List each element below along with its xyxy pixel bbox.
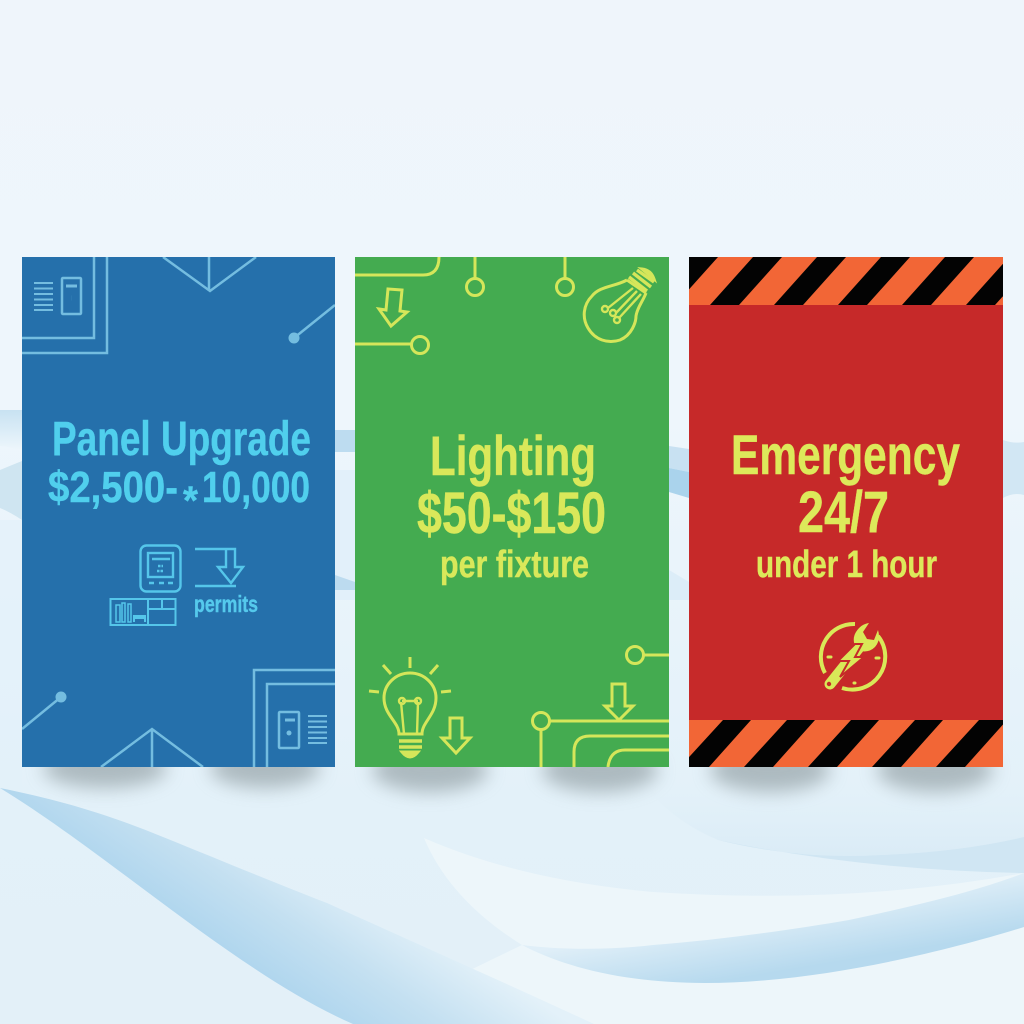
card shadows: [43, 748, 993, 792]
panel: emergency: [689, 257, 1003, 767]
decorative circuit line art, blue card: [22, 257, 335, 767]
price: $2,500 to $10,000: [48, 463, 310, 523]
price: $2,500 to $10,000: $2,500-: [48, 463, 178, 512]
icon: tilted light bulb: [584, 269, 654, 342]
response: under 1 hour: under 1 hour: [756, 544, 937, 586]
price: $2,500 to $10,000: 10,000: [202, 463, 310, 512]
green card background: [355, 257, 669, 767]
arrow: down to permits: [195, 549, 243, 586]
panel: panel upgrade: [22, 257, 335, 767]
panel: lighting: [355, 257, 669, 767]
hazard stripes bottom: [680, 720, 1007, 767]
decorative circuit traces, green card: [355, 257, 669, 767]
hazard stripes top: [689, 257, 1003, 305]
blue card background: [22, 257, 335, 767]
heading: Panel Upgrade: Panel Upgrade: [52, 413, 311, 466]
price: $50-$150: $50-$150: [417, 481, 606, 546]
price: $2,500 to $10,000: *: [183, 479, 198, 523]
label: per fixture: per fixture: [440, 544, 589, 586]
label: permits: permits: [194, 591, 258, 617]
infographic: three service price cards: [0, 257, 1024, 1024]
arrow: down beside bulb: [442, 718, 470, 753]
availability: 24/7: 24/7: [798, 480, 889, 545]
heading: Lighting: Lighting: [430, 424, 596, 487]
icon: electrical meter: [140, 546, 180, 592]
icon: glowing light bulb: [369, 657, 451, 757]
icon: breaker box: [110, 599, 176, 625]
icon: wrench, bolt and clock: [821, 623, 885, 690]
heading: Emergency: Emergency: [731, 423, 960, 486]
red card background: [689, 257, 1003, 767]
